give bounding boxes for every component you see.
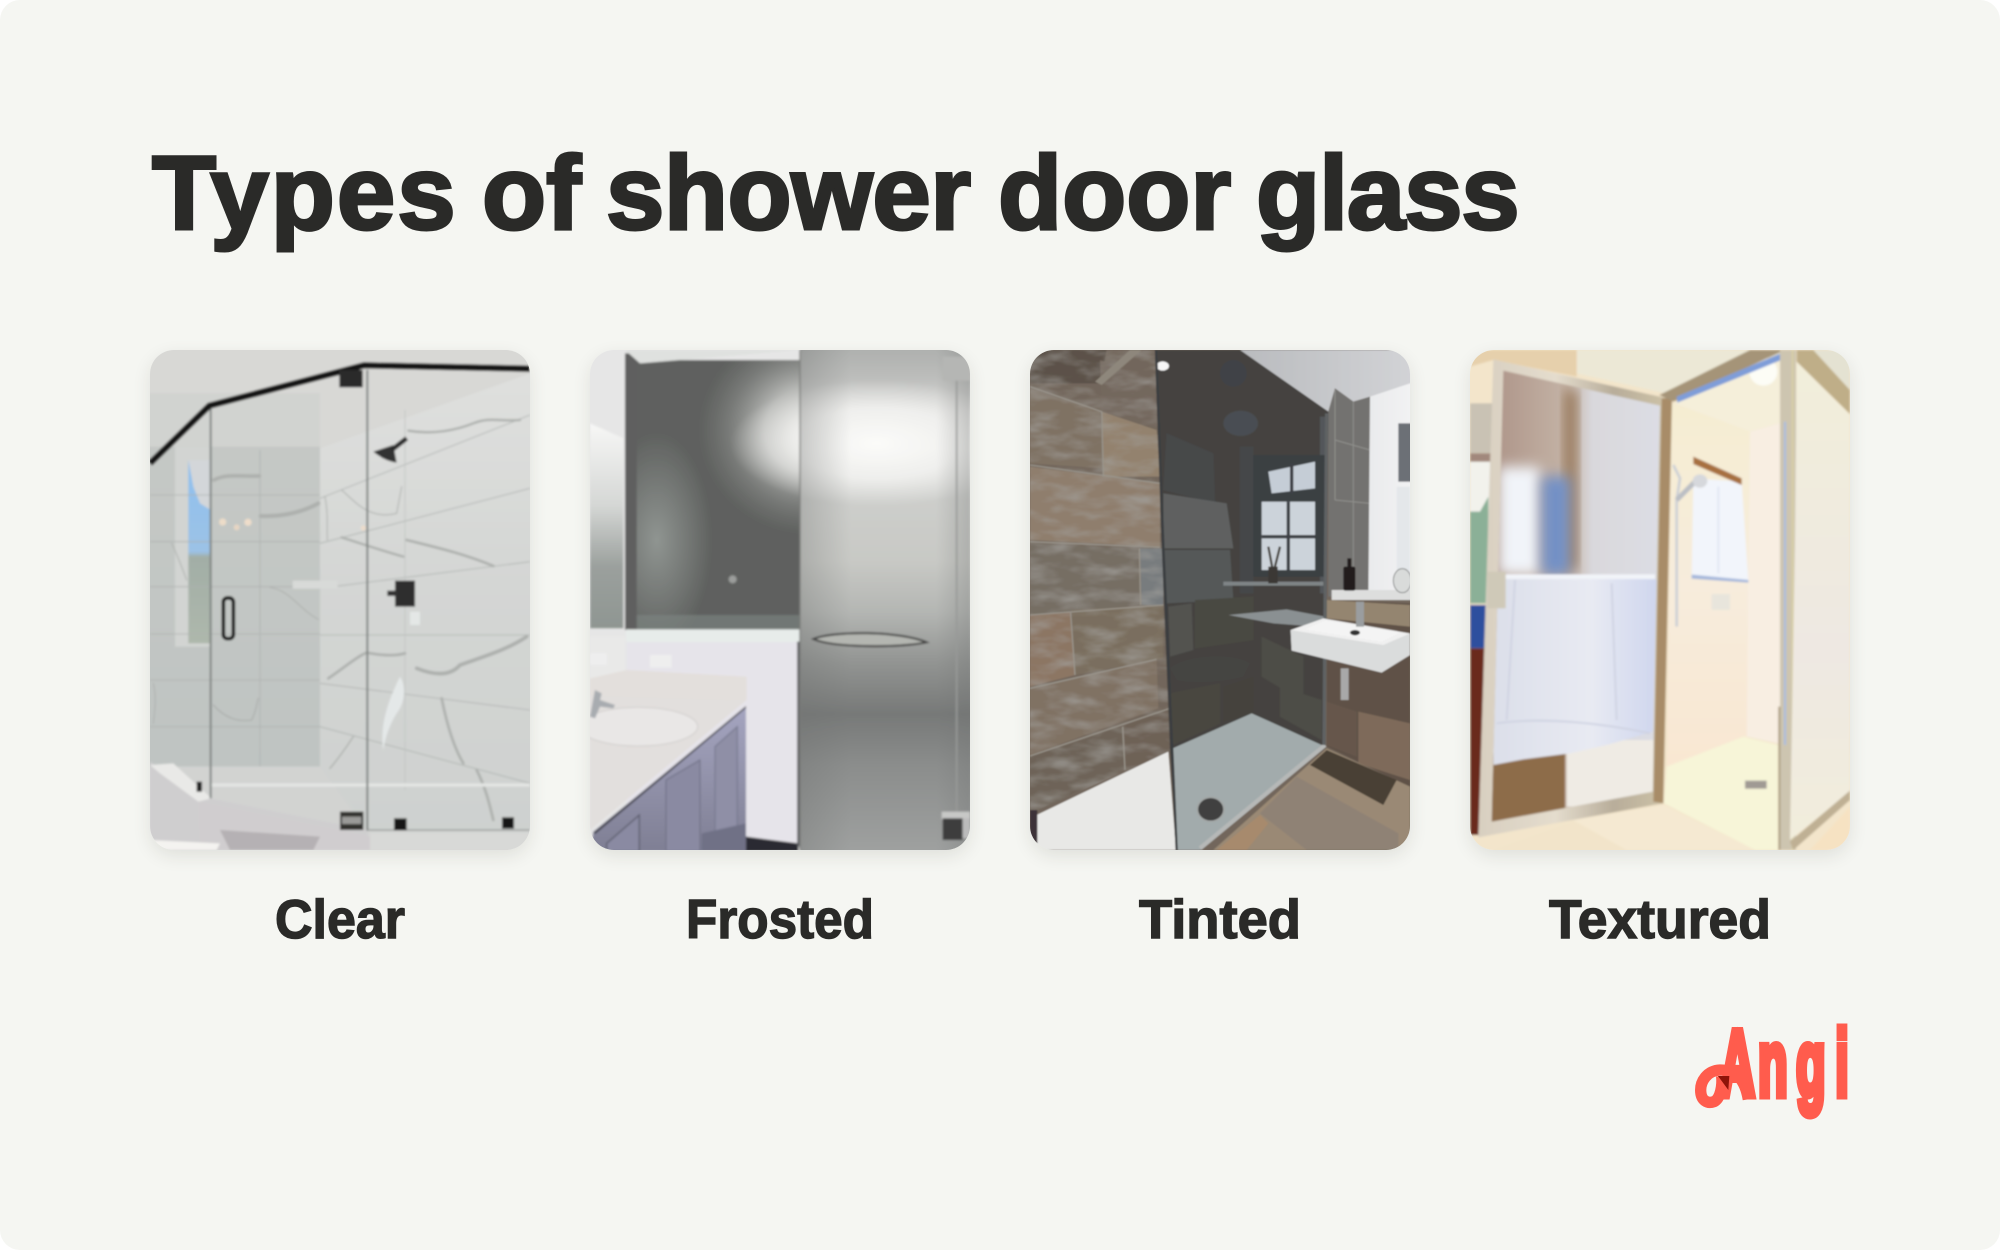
white sink bbox=[1291, 618, 1410, 672]
reflected shelf bbox=[1228, 609, 1325, 627]
stone tiles, left wall bbox=[1030, 350, 1107, 383]
frosted side panel bbox=[636, 358, 801, 631]
label: Tinted: Tinted bbox=[1139, 888, 1301, 950]
window sill bbox=[1332, 590, 1412, 600]
wall knob bbox=[729, 575, 737, 583]
faucet and drain pipe bbox=[1348, 602, 1372, 627]
panel: clear glass photo bbox=[150, 350, 530, 850]
shower floor bbox=[1664, 737, 1778, 850]
reflected lights bbox=[219, 518, 226, 526]
title: shower bbox=[606, 135, 971, 252]
floor bbox=[1213, 748, 1410, 850]
soap dish bbox=[1712, 594, 1730, 610]
hinges bbox=[943, 357, 970, 381]
window bbox=[1253, 455, 1327, 577]
black top rail bbox=[150, 365, 530, 463]
shower seat reflection bbox=[1170, 656, 1250, 682]
cabinet bbox=[590, 707, 747, 852]
lower right stone wall bbox=[1327, 600, 1410, 787]
tinted glass panel bbox=[1155, 350, 1328, 850]
right panel frame bbox=[1797, 350, 1850, 414]
drain bbox=[1197, 797, 1224, 821]
logo: Angi bbox=[1695, 1011, 1849, 1120]
label: Clear: Clear bbox=[275, 888, 405, 950]
shower head and hose bbox=[1673, 465, 1680, 627]
glass reflection bbox=[382, 677, 404, 750]
curtain window bbox=[1692, 478, 1748, 580]
mirror bbox=[590, 423, 623, 628]
room base bbox=[1460, 340, 1860, 860]
logo fold bbox=[1718, 1076, 1729, 1090]
reed diffuser bbox=[1268, 547, 1280, 573]
glass vase bbox=[1393, 569, 1411, 593]
title bbox=[152, 135, 1518, 252]
panel: tinted glass photo bbox=[1030, 350, 1410, 850]
label: Frosted: Frosted bbox=[686, 888, 874, 950]
shower floor bbox=[150, 767, 530, 850]
faucet bbox=[590, 690, 615, 718]
tile lines bbox=[150, 410, 530, 790]
back wall bbox=[140, 393, 320, 767]
ceiling spotlight bbox=[1156, 361, 1169, 371]
bottom-left corner item bbox=[1030, 810, 1037, 843]
stone wall base bbox=[1020, 340, 1420, 860]
top rail bbox=[1659, 350, 1785, 402]
panel: textured glass photo bbox=[1470, 350, 1850, 850]
frosted door bbox=[800, 347, 973, 857]
right grey wall bbox=[1328, 388, 1370, 597]
half wall bbox=[627, 638, 797, 852]
toiletry bottle bbox=[1343, 567, 1355, 591]
countertop bbox=[590, 695, 747, 830]
shower interior wall bbox=[1667, 403, 1750, 767]
textured door glass bbox=[1492, 371, 1660, 822]
dark tile strip bbox=[625, 353, 638, 630]
ceiling bbox=[1240, 350, 1420, 412]
ceiling vent arm bbox=[1095, 350, 1142, 385]
ceiling light bbox=[1749, 358, 1777, 386]
window bbox=[175, 447, 211, 647]
floor bbox=[746, 837, 798, 852]
shower head reflection bbox=[1223, 411, 1258, 436]
glass edges bbox=[211, 370, 530, 831]
logo swash bbox=[1701, 1070, 1748, 1102]
title: of bbox=[482, 135, 582, 252]
title: Types bbox=[152, 135, 458, 252]
center post bbox=[1780, 350, 1796, 850]
door handle bbox=[813, 633, 927, 646]
right textured panel bbox=[1790, 362, 1850, 840]
ceiling bbox=[1673, 357, 1785, 432]
label: Textured: Textured bbox=[1549, 888, 1771, 950]
tub edge bbox=[1573, 805, 1755, 850]
title: door bbox=[998, 135, 1231, 252]
wall base bbox=[580, 340, 980, 860]
marble veins bbox=[153, 420, 527, 820]
hardware bbox=[339, 370, 363, 387]
sink bbox=[579, 707, 698, 746]
panel: frosted glass photo bbox=[590, 350, 970, 850]
bath mat bbox=[1310, 750, 1397, 805]
door hinge latch bbox=[1487, 572, 1506, 608]
left exterior bbox=[1470, 403, 1493, 453]
shower tray white bbox=[1030, 752, 1176, 850]
door edges bbox=[798, 350, 802, 850]
glass edges bbox=[1156, 350, 1177, 850]
title: glass bbox=[1256, 135, 1518, 252]
tinted shower tray bbox=[1173, 713, 1322, 850]
towel bbox=[1493, 575, 1657, 765]
stone mottling bbox=[1030, 350, 1177, 817]
door frame bbox=[1478, 359, 1672, 837]
ceiling bbox=[140, 340, 540, 860]
towel bar bbox=[293, 581, 338, 589]
silver threshold bbox=[1200, 745, 1325, 848]
countertop backsplash bbox=[590, 670, 747, 700]
logo wordmark: Angi bbox=[1720, 1011, 1849, 1115]
right wall bbox=[320, 370, 540, 840]
right window frame bbox=[1368, 380, 1420, 597]
hinge-side post bbox=[1653, 398, 1672, 803]
